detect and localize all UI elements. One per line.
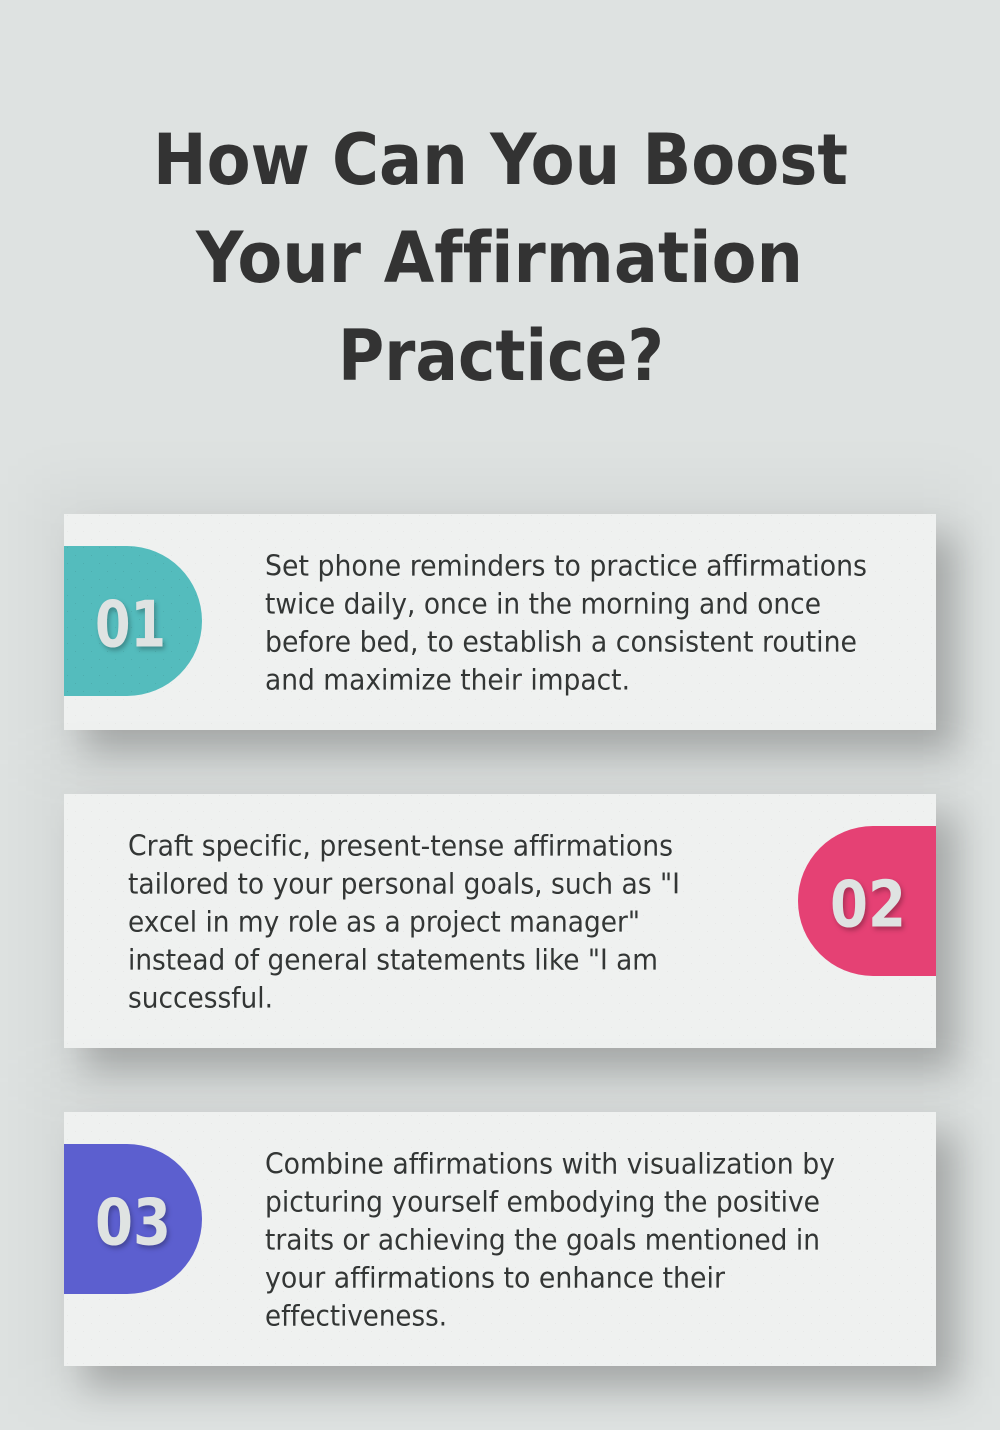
text: step 02 description: instead of general statements like "I am <box>128 944 658 976</box>
text: step 01 description: and maximize their impact. <box>265 664 630 696</box>
title: Your Affirmation <box>195 217 803 299</box>
text: step 02 description: Craft specific, present-tense affirmations <box>128 830 673 862</box>
panel: step 03 <box>34 1082 966 1396</box>
title: How Can You Boost <box>153 119 848 201</box>
title <box>153 119 848 397</box>
text: step 01 description: twice daily, once in the morning and once <box>265 588 821 620</box>
text: step 03 description: your affirmations to enhance their <box>265 1262 725 1294</box>
text: step 03 description: Combine affirmations with visualization by <box>265 1148 835 1180</box>
text: step 03 description <box>265 1148 835 1332</box>
badge: 02: 02 <box>830 868 906 942</box>
text: step 03 description: effectiveness. <box>265 1300 447 1332</box>
text: step 01 description: Set phone reminders to practice affirmations <box>265 550 867 582</box>
title: Practice? <box>338 315 664 397</box>
text: step 01 description <box>265 550 867 696</box>
badge: 03: 03 <box>95 1186 171 1260</box>
text: step 02 description: successful. <box>128 982 273 1014</box>
badge: 03 <box>64 1144 202 1294</box>
badge: 01: 01 <box>95 588 166 662</box>
text: step 02 description <box>128 830 680 1014</box>
text: step 02 description: tailored to your personal goals, such as "I <box>128 868 680 900</box>
text: step 03 description: traits or achieving the goals mentioned in <box>265 1224 820 1256</box>
badge: 02 <box>798 826 936 976</box>
badge: 01 <box>64 546 202 696</box>
panel: step 02 <box>34 764 966 1078</box>
text: step 03 description: picturing yourself embodying the positive <box>265 1186 820 1218</box>
text: step 01 description: before bed, to establish a consistent routine <box>265 626 857 658</box>
text: step 02 description: excel in my role as a project manager" <box>128 906 640 938</box>
panel: step 01 <box>34 484 966 760</box>
